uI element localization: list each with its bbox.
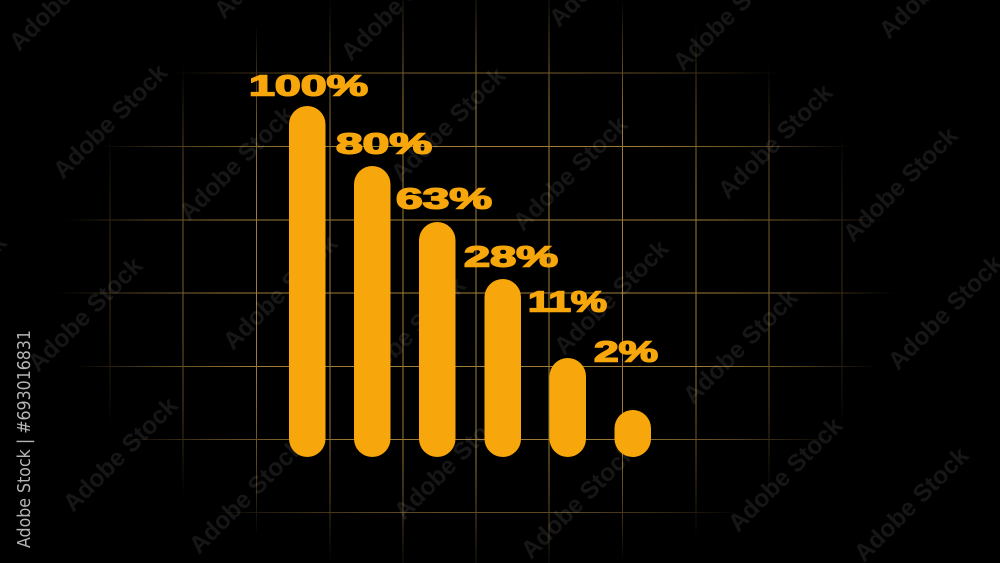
diagonal stock watermarks: Adobe Stock xyxy=(174,101,299,226)
diagonal stock watermarks: Adobe Stock xyxy=(58,392,183,517)
label: 2%: 2% xyxy=(594,336,658,368)
bar: 100% xyxy=(289,106,326,457)
diagonal stock watermarks: Adobe Stock xyxy=(23,252,148,377)
diagonal stock watermarks: Adobe Stock xyxy=(184,434,309,559)
label: 63%: 63% xyxy=(396,184,492,216)
bar chart xyxy=(249,70,658,457)
bar: 63% xyxy=(419,222,456,457)
diagonal stock watermarks: Adobe Stock xyxy=(386,62,511,187)
label: 80%: 80% xyxy=(336,128,432,160)
diagonal stock watermarks: Adobe Stock xyxy=(508,111,633,236)
label: 100%: 100% xyxy=(249,70,368,102)
bar: 2% xyxy=(614,410,651,457)
diagonal stock watermarks: Adobe Stock xyxy=(723,412,848,537)
diagonal stock watermarks: Adobe Stock xyxy=(678,284,803,409)
diagonal stock watermarks: Adobe Stock xyxy=(838,122,963,247)
diagonal stock watermarks: Adobe Stock xyxy=(389,400,514,525)
bar: 11% xyxy=(550,358,586,457)
bar: 80% xyxy=(354,166,390,457)
diagonal stock watermarks: Adobe Stock xyxy=(48,59,173,184)
vertical stock id text: Adobe Stock | #693016831 xyxy=(14,330,35,548)
diagonal stock watermarks: Adobe Stock xyxy=(346,272,471,397)
label: 11%: 11% xyxy=(528,286,607,318)
diagonal stock watermarks: Adobe Stock xyxy=(713,79,838,204)
bar: 28% xyxy=(484,279,521,457)
label: 28%: 28% xyxy=(464,242,558,274)
diagonal stock watermarks: Adobe Stock xyxy=(549,235,674,360)
diagonal stock watermarks: Adobe Stock xyxy=(218,230,343,355)
diagonal stock watermarks: Adobe Stock xyxy=(516,439,641,563)
